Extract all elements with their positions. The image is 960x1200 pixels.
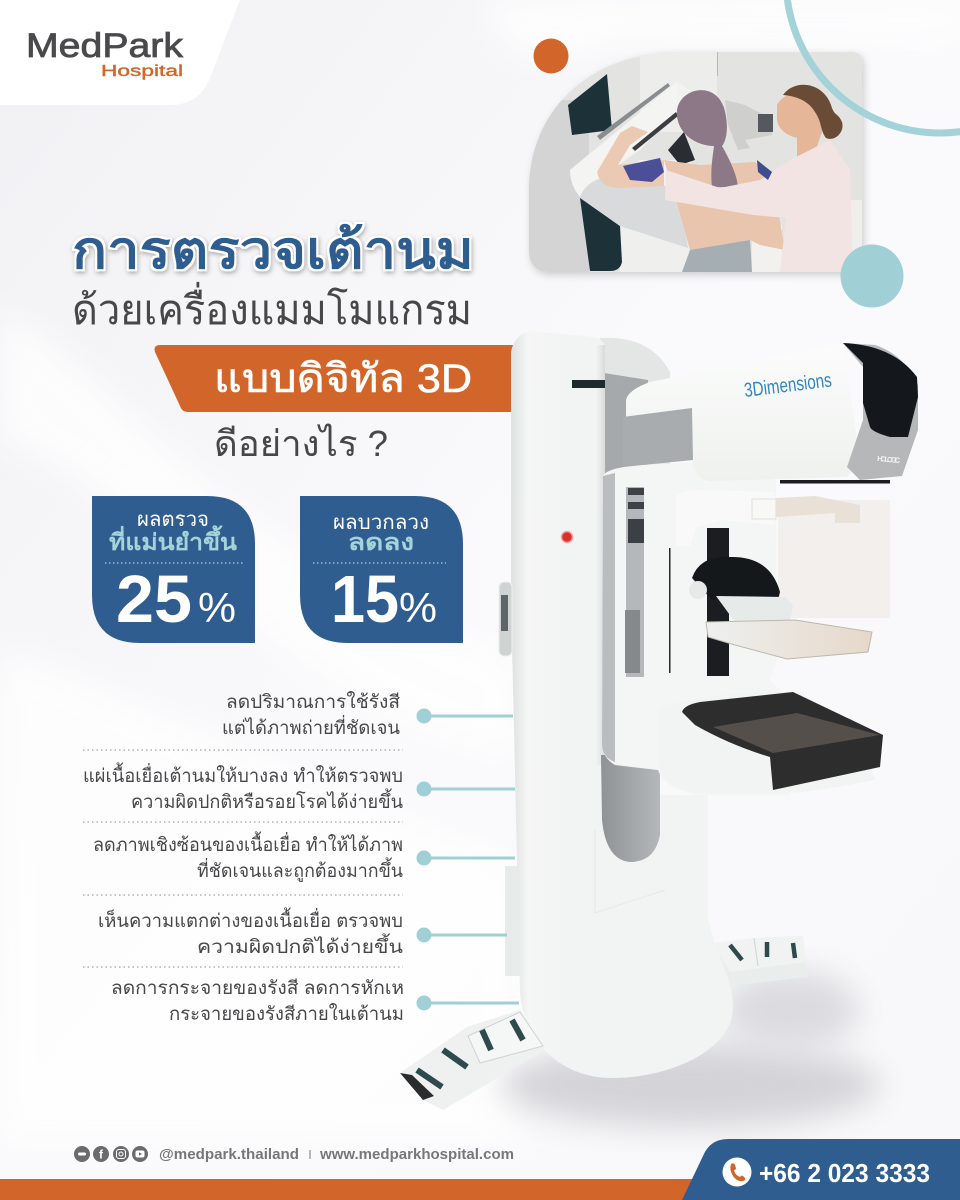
benefit 5: ลดการกระจายของรังสี ลดการหักเห [111, 977, 404, 998]
orange bar [0, 1179, 700, 1200]
tube head dark window [843, 343, 918, 437]
benefit 3: ที่ชัดเจนและถูกต้องมากขึ้น [197, 857, 403, 882]
benefit 2: ความผิดปกติหรือรอยโรคได้ง่ายขึ้น [131, 788, 403, 812]
scanner dark panels [568, 74, 612, 135]
footer [0, 1139, 960, 1200]
benefit 4: ความผิดปกติได้ง่ายขึ้น [197, 933, 403, 957]
compression head [689, 557, 793, 622]
benefit list [83, 691, 519, 1024]
foot pedal left [400, 1010, 545, 1110]
stat card: accuracy 25% [92, 496, 255, 643]
detector plate body [657, 692, 875, 793]
social handle and website [159, 1147, 514, 1163]
benefit 5 [111, 977, 519, 1024]
benefit 2 [83, 762, 515, 812]
subtitle: ด้วยเครื่องแมมโมแกรม [72, 282, 472, 333]
red button [562, 532, 572, 542]
phone panel [682, 1139, 960, 1200]
stat card: false positive 15%: 15 [331, 562, 399, 637]
stat card: false positive 15%: % [399, 584, 437, 631]
benefit 1 [222, 691, 513, 738]
patient arm and back [597, 126, 664, 188]
detector dark plate [682, 692, 883, 790]
benefit 5: กระจายของรังสีภายในเต้านม [169, 1003, 404, 1024]
photo: mammogram examination [529, 52, 862, 272]
social icons: f [99, 1148, 104, 1162]
central arm [602, 462, 790, 795]
benefit 3 [93, 831, 515, 882]
doctor hair [783, 85, 843, 139]
gloves [623, 158, 664, 182]
benefit 2: แผ่เนื้อเยื่อเต้านมให้บางลง ทำให้ตรวจพบ [83, 762, 403, 786]
doctor coat [665, 140, 853, 272]
scanner body [596, 136, 691, 226]
stat card: accuracy 25%: 25 [116, 562, 192, 637]
logo: MedPark Hospital: Hospital [101, 63, 183, 80]
patient hair [677, 90, 738, 187]
3Dimensions label: 3Dimensions [743, 369, 833, 402]
circle: teal [840, 244, 904, 308]
logo: MedPark Hospital: MedPark [26, 27, 184, 65]
indicator bar [572, 380, 605, 388]
stat card: false positive 15%: ผลบวกลวง [333, 512, 429, 534]
mammography machine: HOLOGIC [877, 454, 901, 465]
foot pedal right [708, 936, 808, 986]
stat card: accuracy 25%: % [198, 584, 236, 631]
jeans [682, 240, 752, 272]
logo: MedPark Hospital [26, 27, 184, 80]
social handle and website: www.medparkhospital.com [319, 1147, 514, 1163]
benefit 1: ลดปริมาณการใช้รังสี [226, 691, 400, 712]
question: ดีอย่างไร ? [214, 423, 388, 464]
orange banner [155, 345, 513, 412]
benefit 3: ลดภาพเชิงซ้อนของเนื้อเยื่อ ทำให้ได้ภาพ [93, 831, 403, 855]
circle: orange [534, 38, 568, 74]
background device [725, 100, 772, 150]
tube head body [626, 343, 860, 481]
paddle arm and shield [752, 496, 890, 618]
title: การตรวจเต้านม [72, 222, 474, 280]
clear paddle [706, 620, 872, 659]
grey slot [601, 755, 660, 862]
phone icon [722, 1158, 752, 1186]
logo panel [0, 0, 240, 105]
benefit 4: เห็นความแตกต่างของเนื้อเยื่อ ตรวจพบ [98, 907, 403, 931]
social icons [74, 1146, 148, 1162]
rear grey column top [600, 338, 670, 500]
stat card: false positive 15% [300, 496, 463, 643]
base panel seam [595, 830, 665, 913]
phone number: +66 2 023 3333 [759, 1158, 930, 1188]
side handle [499, 582, 512, 656]
orange banner: แบบดิจิทัล 3D [214, 357, 472, 401]
column and base [511, 331, 733, 1078]
tube head grey cap [843, 343, 918, 480]
benefit 4 [98, 907, 507, 957]
stat card: false positive 15%: ลดลง [348, 529, 414, 555]
social handle and website: @medpark.thailand [159, 1147, 299, 1163]
doctor neck and face [777, 93, 822, 160]
side box [505, 866, 520, 976]
mammography machine [400, 331, 918, 1110]
stat card: accuracy 25%: ที่แม่นยำขึ้น [109, 525, 237, 555]
decorative ring [786, 0, 960, 133]
benefit 1: แต่ได้ภาพถ่ายที่ชัดเจน [222, 715, 400, 738]
stat card: accuracy 25%: ผลตรวจ [137, 509, 209, 531]
